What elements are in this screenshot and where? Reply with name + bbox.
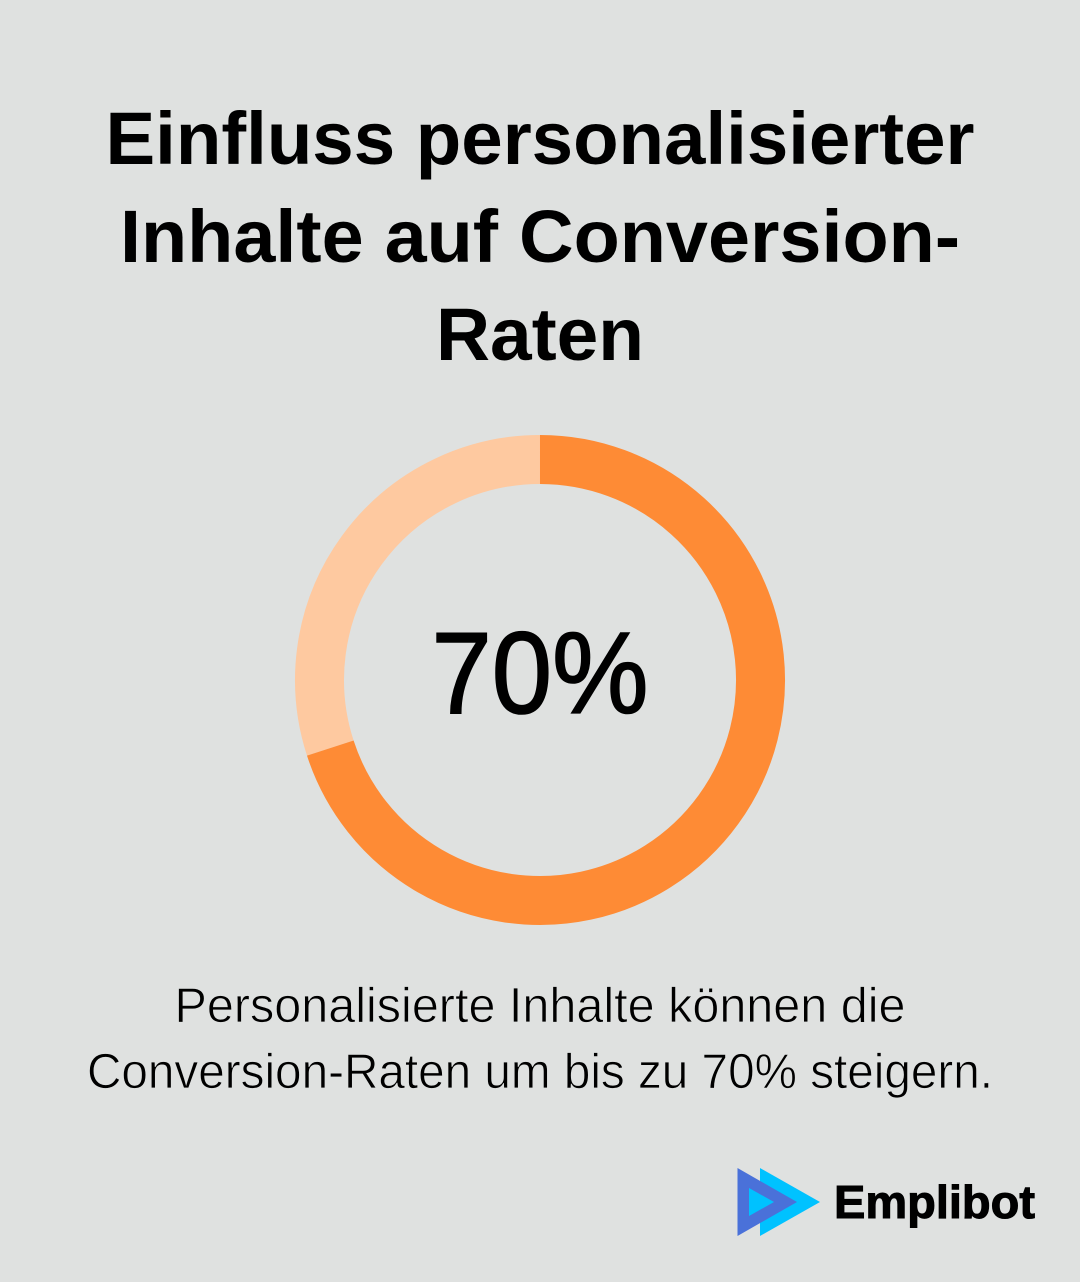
title: Raten bbox=[436, 293, 644, 376]
icon: inner cyan triangle bbox=[749, 1188, 774, 1216]
donut chart: 70% bbox=[320, 460, 761, 900]
icon: blue play triangle bbox=[738, 1168, 797, 1236]
description text: Personalisierte Inhalte können die bbox=[174, 978, 906, 1033]
title: Inhalte auf Conversion- bbox=[120, 195, 960, 278]
donut remainder segment bbox=[320, 460, 540, 748]
donut value segment bbox=[330, 460, 761, 900]
title: Einfluss personalisierter bbox=[106, 97, 974, 180]
logo wordmark: Emplibot bbox=[834, 1176, 1035, 1228]
logo: Emplibot bbox=[738, 1168, 1035, 1236]
description text bbox=[87, 978, 993, 1099]
donut center value: 70% bbox=[432, 608, 648, 738]
icon: cyan play triangle bbox=[760, 1168, 820, 1236]
description text: Conversion-Raten um bis zu 70% steigern. bbox=[87, 1044, 993, 1099]
title bbox=[106, 97, 974, 376]
